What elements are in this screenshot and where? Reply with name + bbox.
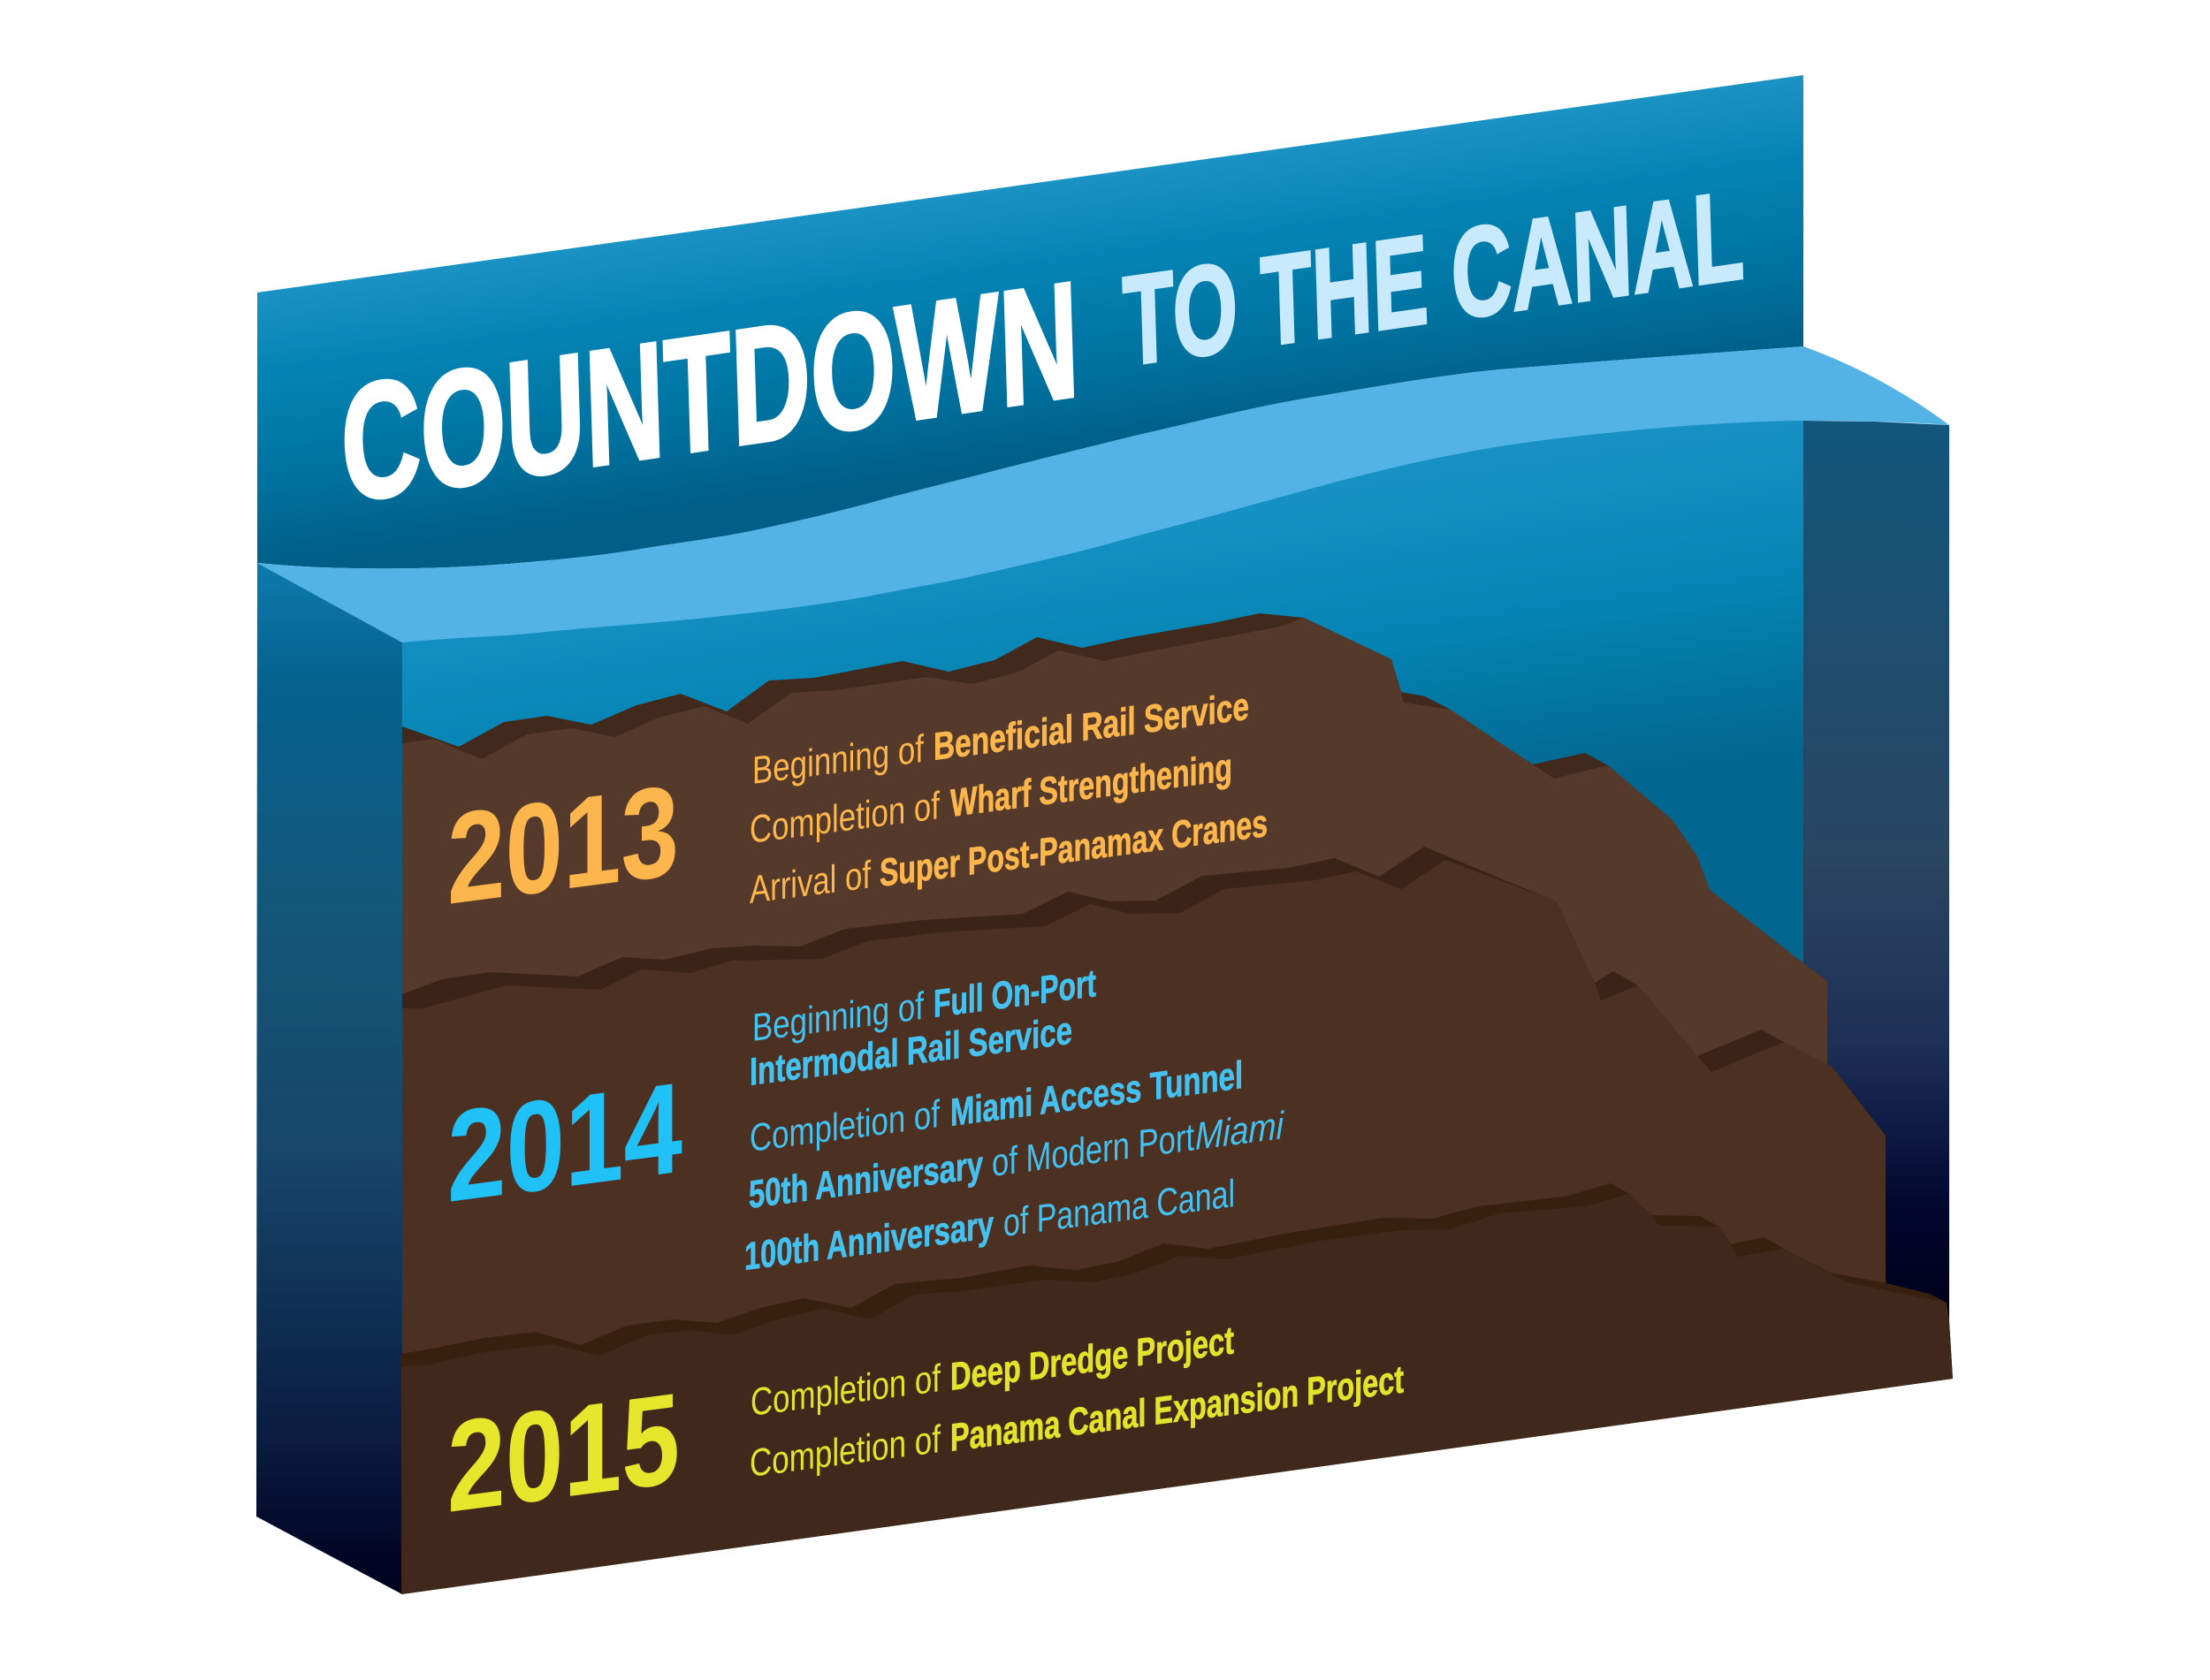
milestones 2015: Deep Dredge Project <box>950 1319 1234 1399</box>
year 2014: 2014 <box>447 1055 682 1230</box>
milestones 2014: Completion of <box>750 1092 941 1160</box>
panel: back wall <box>257 75 1803 568</box>
milestones 2013: Wharf Strengthening <box>950 746 1232 825</box>
year 2015: 2015 <box>447 1365 680 1540</box>
milestones 2014: 100th Anniversary <box>744 1203 994 1279</box>
milestones 2015: Completion of <box>751 1357 941 1425</box>
panel: water surface <box>257 346 1949 642</box>
milestones 2015 <box>750 1319 1404 1486</box>
milestones 2014: Miami Access Tunnel <box>950 1053 1243 1135</box>
milestones 2013 <box>750 685 1268 912</box>
title: countdown: COUNTDOWN <box>339 247 1081 537</box>
milestones 2015: Completion of <box>750 1418 941 1486</box>
milestones 2014: 50th Anniversary <box>749 1144 983 1217</box>
year 2013: 2013 <box>447 757 679 932</box>
milestones 2014: Intermodal Rail Service <box>750 1009 1072 1094</box>
panel: 2014 rock layer <box>402 847 1886 1502</box>
year block: 2014 <box>447 962 1284 1279</box>
title <box>339 163 1746 537</box>
milestones 2013: Beneficial Rail Service <box>934 685 1249 769</box>
panel: 2013 rock layer <box>402 613 1827 1326</box>
year block: 2015 <box>447 1319 1404 1540</box>
panel: 2015 rock layer <box>401 1183 1953 1594</box>
milestones 2013: Beginning of <box>752 727 925 793</box>
milestones 2013: Arrival of <box>750 853 872 912</box>
title: to the canal: TO THE CANAL <box>1121 163 1746 393</box>
milestones 2015: Panama Canal Expansion Project <box>950 1357 1404 1460</box>
milestones 2014: Full On-Port <box>934 962 1096 1026</box>
milestones 2014: Miami <box>1195 1104 1284 1159</box>
milestones 2013: Completion of <box>750 784 941 852</box>
panel: right side face <box>1803 421 1949 1326</box>
milestones 2013: Super Post-Panamax Cranes <box>880 802 1268 895</box>
panel: front water wall <box>402 407 1804 1149</box>
milestones 2014 <box>744 962 1284 1279</box>
year block: 2013 <box>447 685 1268 932</box>
panel: left side face <box>256 563 402 1594</box>
milestones 2014: of Modern Port <box>992 1115 1194 1185</box>
milestones 2014: Beginning of <box>752 984 925 1050</box>
milestones 2014: of Panama Canal <box>1003 1172 1235 1245</box>
